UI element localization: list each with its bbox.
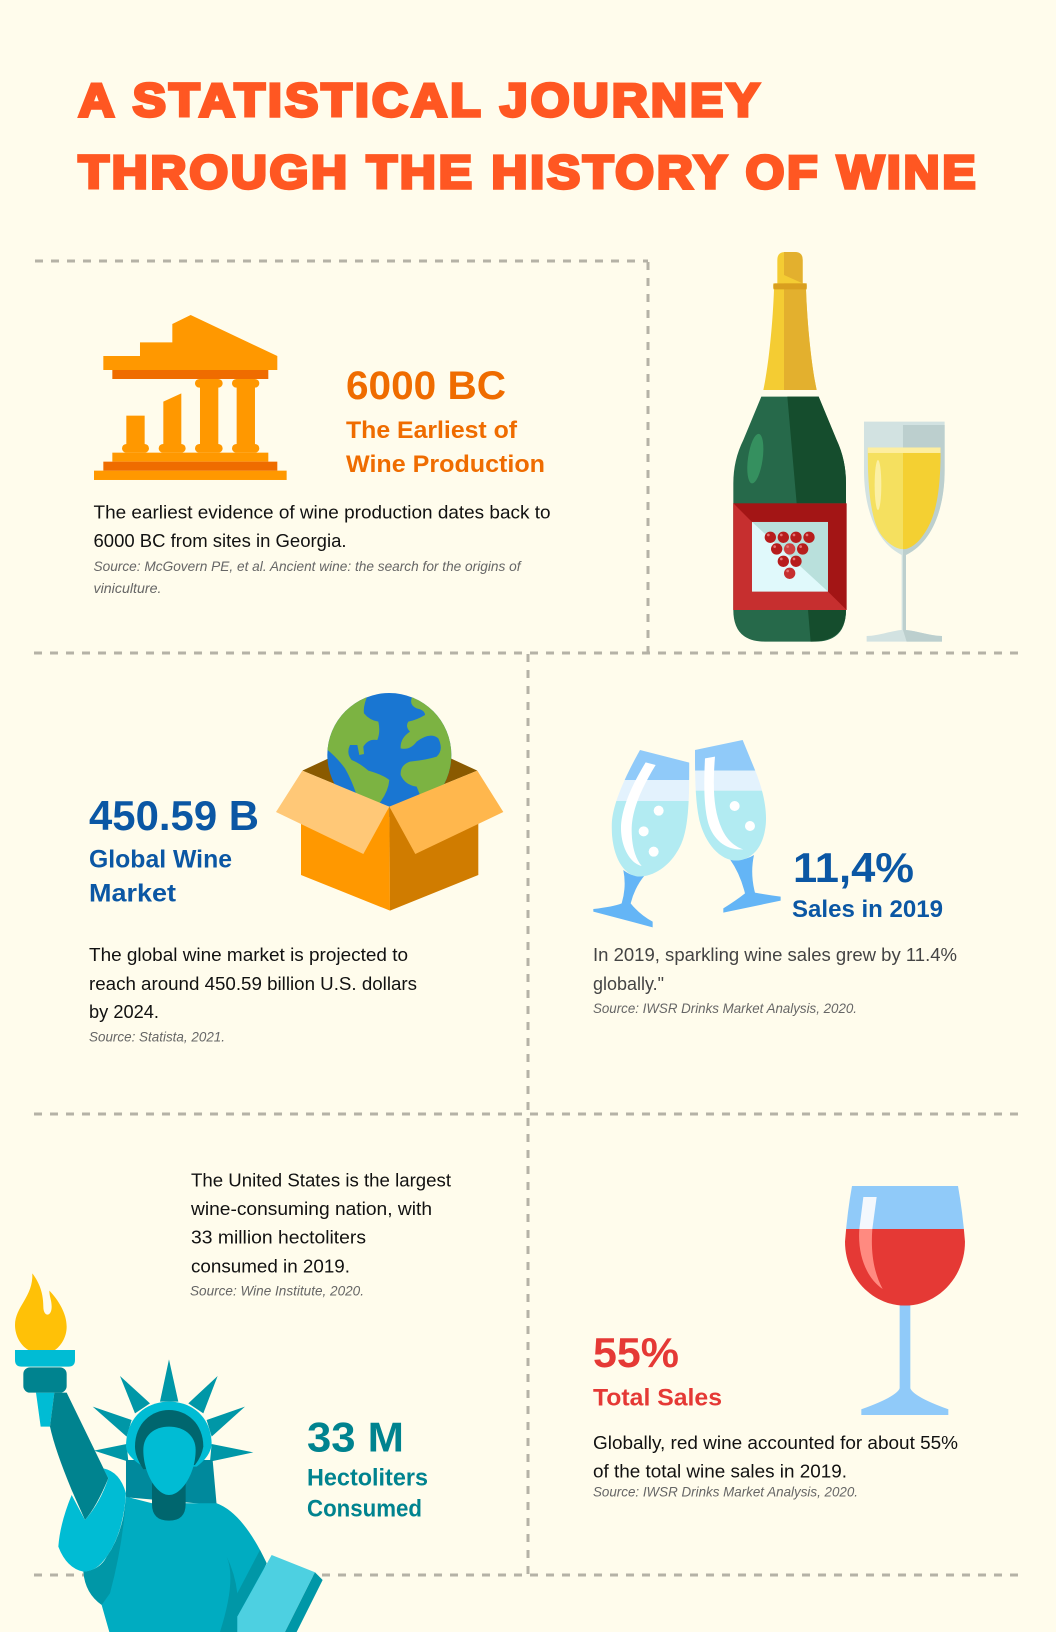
stat: 6000 BC: 6000 BC bbox=[346, 364, 506, 408]
icon: left glass bbox=[593, 743, 693, 927]
body text bbox=[593, 1432, 958, 1482]
body text: 33 million hectoliters bbox=[191, 1226, 366, 1248]
body text bbox=[190, 1170, 451, 1276]
source note: Source: IWSR Drinks Market Analysis, 2020. bbox=[593, 1000, 857, 1016]
source note: viniculture. bbox=[94, 580, 162, 596]
panel: 6000 BC earliest wine production bbox=[94, 315, 550, 596]
title: THROUGH THE HISTORY OF WINE bbox=[78, 148, 976, 199]
source note: Source: Statista, 2021. bbox=[89, 1028, 225, 1044]
panel: global wine market bbox=[89, 690, 503, 1044]
title bbox=[78, 76, 976, 199]
subheading: total sales: Total Sales bbox=[593, 1384, 722, 1412]
icon: right glass bbox=[693, 737, 781, 913]
icon: champagne bottle and glass bbox=[733, 252, 945, 642]
stat: 55%: 55% bbox=[593, 1329, 679, 1376]
subheading: hectoliters consumed bbox=[307, 1464, 428, 1522]
stat: 450.59 B: 450.59 B bbox=[89, 792, 259, 839]
icon: head bbox=[126, 1402, 212, 1521]
body text: In 2019, sparkling wine sales grew by 11.4% bbox=[593, 944, 957, 965]
icon: clinking champagne glasses bbox=[593, 737, 781, 927]
icon: globe in box bbox=[276, 690, 503, 911]
body text: The United States is the largest bbox=[191, 1170, 451, 1190]
icon: torch flame bbox=[15, 1273, 67, 1350]
subheading: global wine market bbox=[89, 846, 232, 908]
stat: 33 M: 33 M bbox=[307, 1414, 404, 1460]
subheading: global wine market: Global Wine bbox=[89, 846, 232, 874]
subheading: the earliest of wine production bbox=[346, 417, 545, 478]
subheading: sales in 2019: Sales in 2019 bbox=[792, 896, 943, 923]
title: A STATISTICAL JOURNEY bbox=[78, 76, 760, 127]
body text: consumed in 2019. bbox=[191, 1256, 350, 1276]
icon: tablet bbox=[237, 1555, 323, 1632]
body text: The global wine market is projected to bbox=[89, 944, 408, 965]
source note: Source: McGovern PE, et al. Ancient wine: the search for the origins of bbox=[94, 558, 523, 574]
panel: US wine consumption bbox=[15, 1170, 451, 1632]
body text: The earliest evidence of wine production dates back to bbox=[94, 502, 550, 522]
subheading: the earliest of wine production: The Earliest of bbox=[346, 417, 518, 444]
body text bbox=[89, 944, 417, 1022]
icon: red wine glass bbox=[843, 1185, 967, 1415]
panel: sparkling wine sales bbox=[593, 737, 957, 1016]
body text bbox=[593, 944, 957, 994]
body text: globally." bbox=[593, 973, 664, 994]
panel: red wine share bbox=[593, 1185, 967, 1500]
subheading: global wine market: Market bbox=[89, 880, 177, 908]
stat: 11,4%: 11,4% bbox=[793, 844, 914, 891]
source note: Source: Wine Institute, 2020. bbox=[190, 1282, 364, 1298]
icon: temple bar chart bbox=[94, 315, 287, 480]
icon: statue of liberty bbox=[15, 1273, 323, 1632]
body text: by 2024. bbox=[89, 1001, 159, 1022]
body text: of the total wine sales in 2019. bbox=[593, 1460, 847, 1482]
icon: bottle bbox=[733, 252, 847, 642]
icon: torch bbox=[15, 1350, 75, 1427]
subheading: hectoliters consumed: Consumed bbox=[307, 1496, 422, 1522]
source note bbox=[94, 558, 523, 596]
icon: robed body bbox=[50, 1393, 267, 1632]
source note: Source: IWSR Drinks Market Analysis, 2020. bbox=[593, 1484, 858, 1500]
body text: reach around 450.59 billion U.S. dollars bbox=[89, 973, 417, 994]
body text bbox=[94, 502, 550, 551]
icon: champagne flute bbox=[864, 422, 945, 642]
body text: Globally, red wine accounted for about 55% bbox=[593, 1432, 958, 1453]
body text: wine-consuming nation, with bbox=[190, 1198, 432, 1219]
icon: crown bbox=[93, 1359, 253, 1462]
subheading: the earliest of wine production: Wine Production bbox=[346, 451, 545, 478]
body text: 6000 BC from sites in Georgia. bbox=[94, 530, 346, 551]
subheading: hectoliters consumed: Hectoliters bbox=[307, 1464, 428, 1492]
